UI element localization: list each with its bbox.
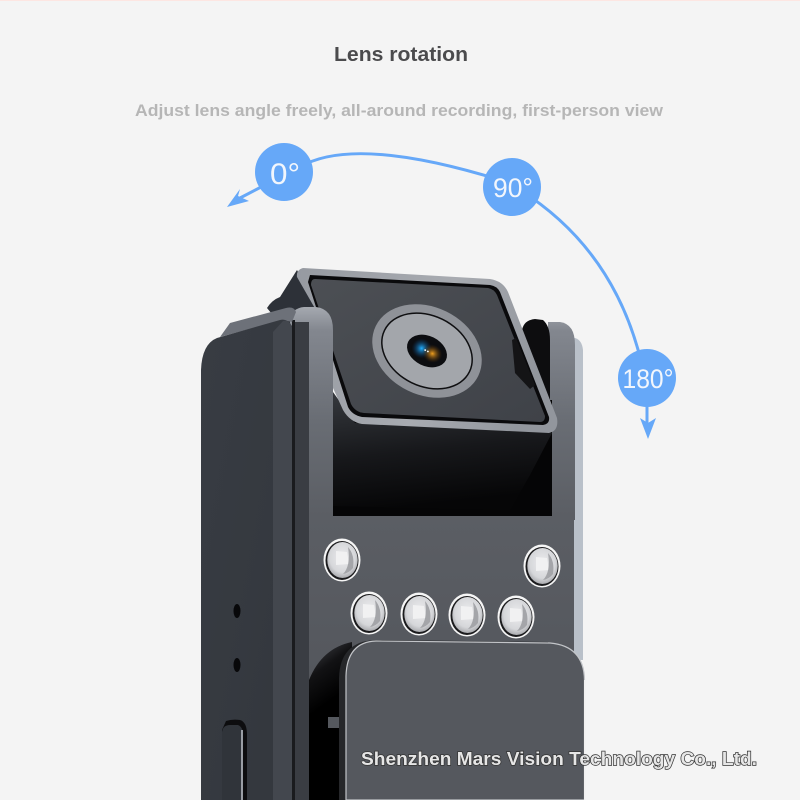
microphone holes bbox=[234, 604, 240, 672]
arrowhead at 180 degrees bbox=[640, 418, 656, 439]
arc 0 to 90 degrees bbox=[300, 154, 500, 180]
front plate bbox=[309, 516, 574, 800]
head face bbox=[311, 279, 545, 422]
rotating lens head bbox=[297, 268, 557, 433]
subtitle: Adjust lens angle freely, all-around recording, first-person view bbox=[135, 101, 664, 120]
left side panel bbox=[201, 308, 296, 800]
back hinge bbox=[267, 270, 330, 330]
lens glass bbox=[402, 328, 452, 374]
title: Lens rotation bbox=[334, 44, 468, 66]
right metal column bbox=[522, 319, 583, 660]
arrow shaft 180 degrees bbox=[646, 400, 648, 425]
camera device bbox=[201, 268, 586, 800]
magnetic clip bbox=[309, 640, 586, 800]
arrowhead at 0 degrees bbox=[227, 189, 249, 207]
side button bbox=[222, 720, 247, 800]
badge: 0 degrees: 0° bbox=[270, 158, 300, 191]
watermark: Shenzhen Mars Vision Technology Co., Ltd. bbox=[361, 749, 757, 769]
arc 90 to 180 degrees bbox=[520, 190, 642, 365]
badge: 90 degrees bbox=[483, 158, 541, 216]
badge: 180 degrees: 180° bbox=[622, 364, 674, 394]
arrow shaft 0 degrees bbox=[240, 185, 265, 198]
head frame bbox=[297, 268, 557, 433]
recessed window and camera housing bbox=[333, 392, 552, 516]
infrared LED lights bbox=[324, 538, 560, 638]
badge: 0 degrees bbox=[255, 143, 313, 201]
badge: 180 degrees bbox=[618, 349, 676, 407]
lens ring bbox=[356, 286, 498, 416]
rotation arcs and arrows bbox=[240, 154, 647, 425]
badge: 90 degrees: 90° bbox=[493, 173, 533, 203]
left metal frame bbox=[290, 307, 333, 800]
